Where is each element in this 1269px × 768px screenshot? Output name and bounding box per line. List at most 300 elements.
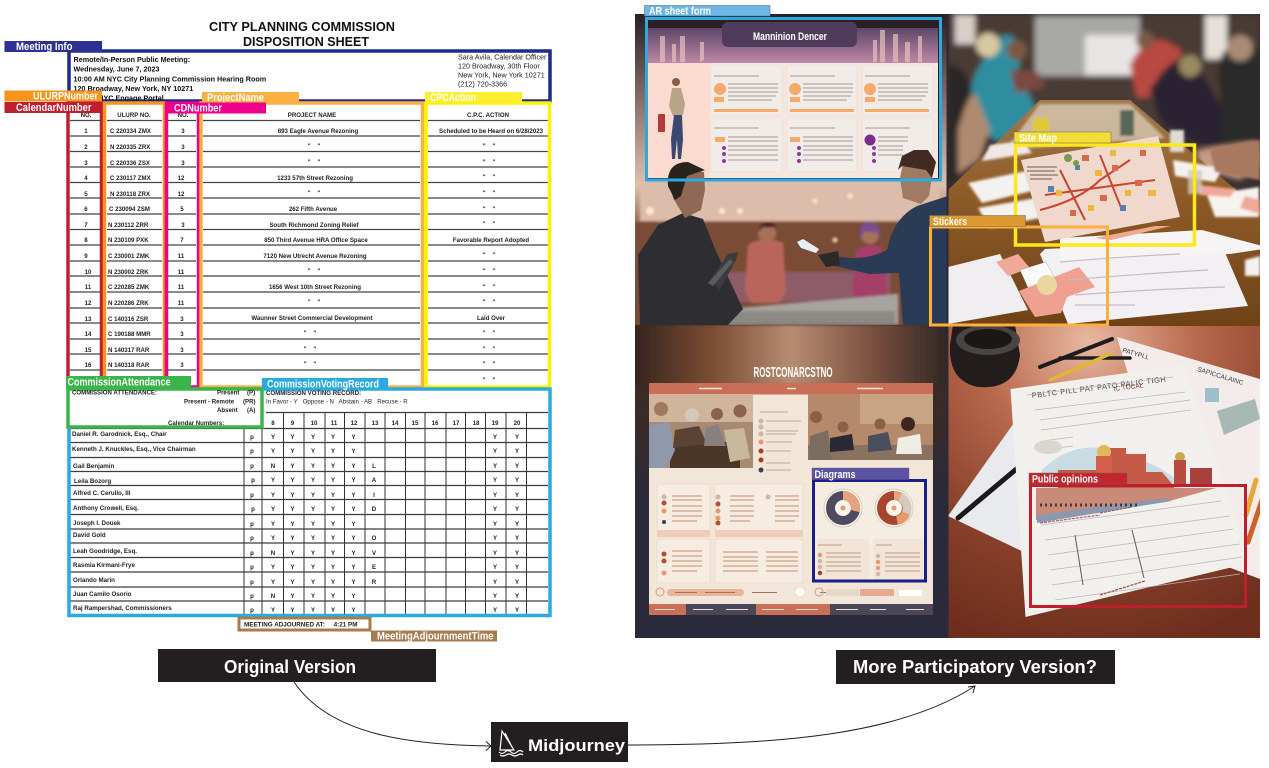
frame: stickers	[930, 227, 1108, 325]
votes: Y	[351, 579, 356, 586]
frame: AR sheet form	[646, 18, 940, 180]
votes: Y	[290, 434, 295, 441]
attendance legend	[72, 390, 256, 427]
table text: 13	[85, 316, 92, 323]
label: ULURPNumber: ULURPNumber	[33, 90, 99, 102]
main survey sheet: IC TOCAL	[1113, 382, 1144, 393]
votes: Y	[290, 521, 295, 528]
commissioner names: Juan Camilo Osorio	[73, 591, 132, 598]
votes: Y	[515, 506, 519, 513]
calendar officer address: 120 Broadway, 30th Floor	[458, 62, 540, 70]
votes	[250, 434, 519, 614]
votes: Y	[271, 564, 275, 571]
wooden table	[948, 100, 1260, 326]
table text: 5	[180, 206, 184, 213]
form cards	[711, 65, 933, 172]
table text: 7	[84, 222, 88, 229]
votes: Y	[331, 521, 335, 528]
votes: Y	[515, 579, 519, 586]
label: ProjectName	[202, 92, 299, 104]
table text: N 230109 PXK	[108, 237, 149, 244]
arrow: Midjourney to More Participatory Version	[628, 686, 975, 745]
votes: Y	[290, 477, 295, 484]
table text: Waunner Street Commercial Development	[251, 315, 373, 322]
votes: Y	[331, 434, 335, 441]
meeting adjourned box	[239, 618, 370, 630]
table text: " "	[483, 221, 495, 228]
votes: Y	[290, 564, 295, 571]
votes: p	[250, 550, 254, 557]
meeting details text: 120 Broadway, New York, NY 10271	[74, 84, 193, 93]
table text: 11	[178, 269, 185, 276]
votes: Y	[515, 448, 519, 455]
votes: Y	[493, 521, 497, 528]
votes: p	[250, 579, 254, 586]
votes: O	[372, 535, 377, 542]
table text: NO.	[81, 112, 92, 119]
votes: p	[251, 506, 255, 513]
votes: Y	[311, 535, 315, 542]
box: Midjourney: Midjourney	[528, 736, 626, 755]
row rules	[70, 120, 548, 370]
woman figure	[658, 78, 685, 159]
votes: Y	[493, 579, 497, 586]
votes: Y	[311, 564, 315, 571]
votes: Y	[515, 550, 519, 557]
voting legend: In Favor - Y Oppose - N Abstain - AB Recuse - R	[266, 398, 408, 406]
table text: " "	[308, 299, 320, 306]
votes: Y	[493, 434, 497, 441]
votes: Y	[515, 463, 519, 470]
votes: Y	[493, 607, 497, 614]
box: Midjourney	[491, 722, 628, 762]
calendar numbers header: 9	[291, 420, 295, 427]
votes: Y	[271, 579, 275, 586]
voting legend	[266, 390, 408, 406]
table text: " "	[304, 346, 316, 353]
table text: 7120 New Utrecht Avenue Rezoning	[263, 253, 367, 260]
label: CommissionAttendance: CommissionAttendance	[68, 376, 170, 388]
votes: Y	[290, 535, 295, 542]
table text: C.P.C. ACTION	[467, 112, 509, 119]
attendance legend: Present - Remote	[184, 398, 235, 406]
table text: 11	[85, 284, 92, 291]
table text: 16	[85, 362, 92, 369]
label: AR sheet form	[644, 6, 770, 18]
votes: Y	[515, 477, 519, 484]
donut 1	[824, 489, 862, 527]
label: Site Map: Site Map	[1019, 132, 1057, 144]
votes: Y	[311, 579, 315, 586]
votes: Y	[351, 463, 356, 470]
table text: " "	[483, 159, 495, 166]
label: ProjectName: ProjectName	[207, 92, 264, 104]
table text: N 230002 ZRK	[108, 269, 149, 276]
illustrated site map	[1021, 136, 1180, 242]
commissioner names: Alfred C. Cerullo, III	[73, 490, 131, 497]
label: Meeting Info: Meeting Info	[16, 41, 73, 53]
votes: Y	[311, 593, 315, 600]
table text: " "	[483, 252, 495, 259]
table text: " "	[483, 299, 495, 306]
poster header bar	[649, 383, 933, 394]
votes: Y	[493, 564, 497, 571]
votes: Y	[515, 564, 519, 571]
pens	[958, 339, 1262, 542]
attendance legend: COMMISSION ATTENDANCE:	[72, 390, 157, 396]
table text: C 140316 ZSR	[108, 316, 149, 323]
man right	[835, 196, 948, 325]
left stacked sheet	[948, 420, 1030, 555]
title	[209, 20, 395, 49]
survey title text: PBLTC PILL PAT PATO PALIC TIGH	[1031, 375, 1166, 400]
table text: 15	[85, 347, 92, 354]
votes: I	[373, 492, 375, 499]
form text lines	[714, 76, 928, 160]
caption: More Participatory Version?	[836, 650, 1115, 684]
table text: 893 Eagle Avenue Rezoning	[278, 128, 359, 135]
table text: C 220336 ZSX	[110, 160, 151, 167]
poster photo: group	[808, 394, 933, 460]
table text: PROJECT NAME	[288, 112, 336, 119]
votes: Y	[493, 535, 497, 542]
caption: Original Version	[158, 649, 436, 682]
photo: workshop table with site map	[948, 14, 1269, 326]
votes: Y	[331, 492, 335, 499]
panel: commission attendance	[68, 389, 262, 427]
attendance legend: (PR)	[243, 398, 256, 406]
votes: Y	[515, 434, 519, 441]
votes: Y	[311, 448, 315, 455]
votes: Y	[290, 607, 295, 614]
table text: 11	[178, 300, 185, 307]
table text: " "	[483, 143, 495, 150]
label: AR sheet form: AR sheet form	[649, 6, 711, 18]
commissioner names: Leah Goodridge, Esq.	[73, 548, 137, 555]
table text: 3	[181, 160, 185, 167]
votes: Y	[311, 492, 315, 499]
meeting adjourned box: MEETING ADJOURNED AT: 4:21 PM	[244, 622, 357, 628]
votes: Y	[493, 463, 497, 470]
back sheet labels: PATYPLL	[1121, 347, 1150, 362]
table text: 11	[178, 253, 185, 260]
meeting details text: Remote/In-Person Public Meeting:	[74, 55, 190, 64]
calendar numbers header	[271, 420, 521, 427]
votes: Y	[351, 477, 356, 484]
table text: 3	[180, 316, 184, 323]
table text: ULURP NO.	[117, 112, 151, 119]
votes: Y	[331, 579, 335, 586]
man left	[638, 213, 743, 325]
table text: 5	[84, 191, 88, 198]
table text: C 220334 ZMX	[110, 128, 152, 135]
votes: N	[271, 463, 275, 470]
table text: Laid Over	[477, 315, 506, 322]
meeting details text: Wednesday, June 7, 2023	[74, 64, 160, 74]
votes: Y	[311, 550, 315, 557]
votes: Y	[331, 477, 335, 484]
table text: N 230118 ZRX	[110, 191, 151, 198]
calendar numbers header: 11	[331, 420, 338, 427]
poster cards	[657, 484, 803, 583]
calendar numbers header: 10	[311, 420, 318, 427]
votes: Y	[331, 550, 335, 557]
votes: Y	[271, 477, 275, 484]
table text: " "	[308, 143, 320, 150]
meeting details text	[74, 55, 266, 102]
votes: Y	[351, 550, 356, 557]
votes: Y	[351, 448, 356, 455]
frame: calendar number column	[68, 103, 102, 387]
table text: N 220286 ZRK	[108, 300, 149, 307]
calendar numbers header: 12	[351, 420, 358, 427]
label: Stickers	[930, 216, 1026, 228]
AR sheet form content	[647, 19, 940, 180]
calendar officer address: New York, New York 10271	[458, 70, 545, 80]
table papers and objects	[968, 104, 1260, 276]
table text: " "	[483, 330, 495, 337]
sheet text lines	[1060, 254, 1225, 305]
table text: C 230001 ZMK	[108, 253, 150, 260]
table text: 1	[84, 128, 88, 135]
votes: p	[250, 593, 254, 600]
table text: 8	[84, 237, 88, 244]
commissioner names: Raj Rampershad, Commissioners	[73, 605, 172, 612]
table text: 12	[178, 175, 185, 182]
dark strip between photos	[946, 14, 948, 638]
table text: 11	[178, 284, 185, 291]
votes: Y	[290, 448, 295, 455]
panel: commission voting record	[69, 389, 550, 616]
votes: Y	[351, 434, 356, 441]
label: ULURPNumber	[4, 90, 102, 102]
table text: C 230094 ZSM	[109, 206, 150, 213]
votes: Y	[331, 506, 335, 513]
table text: 3	[181, 128, 185, 135]
calendar numbers header: 8	[271, 420, 275, 427]
table text: " "	[483, 377, 495, 384]
table text: 3	[181, 144, 185, 151]
commissioner names: David Gold	[73, 532, 106, 539]
votes: Y	[290, 593, 295, 600]
table text: " "	[304, 361, 316, 368]
meeting details text: via the NYC Engage Portal	[74, 94, 164, 102]
votes: L	[372, 463, 376, 470]
calendar officer address: (212) 720-3366	[458, 80, 507, 88]
votes: Y	[311, 463, 315, 470]
votes: Y	[290, 492, 295, 499]
table text: 850 Third Avenue HRA Office Space	[264, 237, 368, 244]
votes: Y	[515, 521, 519, 528]
votes: p	[250, 434, 254, 441]
table text: C 230117 ZMX	[110, 175, 152, 182]
commissioner names: Leila Bozorg	[74, 478, 111, 485]
votes: N	[271, 593, 275, 600]
form title pill	[722, 22, 857, 47]
table text: 2	[84, 144, 88, 151]
poster footer bar	[649, 604, 933, 615]
votes: Y	[331, 607, 335, 614]
votes: Y	[351, 593, 356, 600]
votes: Y	[290, 506, 295, 513]
attendance legend: (A)	[247, 407, 255, 414]
table text: 7	[180, 237, 184, 244]
votes: p	[250, 521, 254, 528]
label: MeetingAdjournmentTime: MeetingAdjournmentTime	[377, 630, 494, 642]
calendar numbers header: 13	[372, 420, 379, 427]
photo: library scene with infographic	[635, 325, 948, 638]
votes: N	[271, 550, 275, 557]
label: CPCAction	[425, 92, 522, 104]
label: CDNumber	[165, 102, 266, 114]
votes: p	[251, 477, 255, 484]
photo: AR meeting scene	[635, 14, 948, 325]
table text: 1233 57th Street Rezoning	[277, 175, 353, 182]
main survey sheet: SAPICCALAINC	[1196, 366, 1244, 387]
votes: Y	[311, 521, 315, 528]
votes: p	[250, 564, 254, 571]
photo: desk with paper survey forms	[948, 325, 1262, 638]
form title pill: Manninion Dencer	[753, 31, 828, 43]
frame: CPC action column	[426, 103, 550, 387]
table text: 3	[181, 222, 185, 229]
poster photo: elders	[649, 394, 753, 468]
calendar officer address	[458, 52, 547, 88]
caption: More Participatory Version?: More Participatory Version?	[853, 657, 1097, 677]
icon: Midjourney sailboat	[499, 731, 523, 756]
votes: Y	[271, 448, 275, 455]
attendance legend: Present	[217, 390, 239, 396]
commissioner names: Kenneth J. Knuckles, Esq., Vice Chairman	[72, 446, 196, 453]
commissioner names: Daniel R. Garodnick, Esq., Chair	[72, 431, 167, 438]
calendar officer address: Sara Avila, Calendar Officer	[458, 52, 547, 62]
frame: CD number column	[166, 103, 198, 387]
label: CPCAction: CPCAction	[430, 92, 476, 104]
watercolor town	[1036, 445, 1216, 523]
votes: Y	[331, 463, 335, 470]
workshop sheets on table	[948, 230, 1269, 324]
label: Meeting Info	[4, 41, 102, 53]
infographic poster	[649, 383, 933, 604]
votes: Y	[331, 593, 335, 600]
sticker notes	[996, 254, 1095, 317]
votes: p	[250, 535, 254, 542]
votes: Y	[351, 506, 356, 513]
title: DISPOSITION SHEET	[243, 35, 369, 49]
commissioner names	[72, 431, 196, 612]
arrow: Original Version to Midjourney	[294, 682, 491, 750]
votes: Y	[351, 492, 356, 499]
mug	[950, 325, 1020, 387]
votes: Y	[271, 607, 275, 614]
attendance legend: Calendar Numbers:	[168, 420, 224, 427]
votes: p	[250, 463, 254, 470]
table text: " "	[308, 159, 320, 166]
table text: N 140317 RAR	[108, 347, 150, 354]
table text: " "	[483, 206, 495, 213]
title: CITY PLANNING COMMISSION	[209, 20, 395, 34]
label: CommissionVotingRecord: CommissionVotingRecord	[267, 378, 379, 390]
votes: Y	[493, 477, 497, 484]
votes: Y	[515, 492, 519, 499]
votes: Y	[290, 550, 295, 557]
votes: Y	[331, 448, 335, 455]
votes: Y	[271, 506, 275, 513]
table text: 4	[84, 175, 88, 182]
votes: Y	[290, 579, 295, 586]
votes: Y	[311, 607, 315, 614]
frame: public opinions	[1030, 486, 1246, 606]
votes: Y	[311, 506, 315, 513]
votes: Y	[290, 463, 295, 470]
table text: 3	[84, 160, 88, 167]
calendar numbers header: 17	[453, 420, 460, 427]
main survey sheet	[1010, 347, 1260, 617]
votes: Y	[493, 492, 497, 499]
frame: ULURP number column	[104, 103, 164, 387]
label: Diagrams: Diagrams	[814, 469, 856, 481]
table text: 3	[180, 347, 184, 354]
table text: " "	[483, 190, 495, 197]
commissioner names: Anthony Crowell, Esq.	[73, 505, 139, 512]
votes: A	[372, 477, 377, 484]
frame: diagrams	[814, 480, 926, 581]
votes: Y	[271, 535, 275, 542]
table text: C 220285 ZMK	[108, 284, 150, 291]
table text: 9	[84, 253, 88, 260]
table text: " "	[483, 268, 495, 275]
votes: R	[372, 579, 377, 586]
table text: " "	[483, 284, 495, 291]
commissioner names: Gail Benjamin	[73, 463, 114, 470]
poster card text lines	[672, 496, 799, 571]
voting legend: COMMISSION VOTING RECORD:	[266, 390, 361, 397]
table text: 3	[180, 362, 184, 369]
table text: 6	[84, 206, 88, 213]
calendar numbers header: 19	[492, 420, 499, 427]
purple bullets	[722, 146, 876, 163]
donut card rows	[817, 539, 869, 579]
poster title: ROSTCONARCSTNO	[754, 364, 833, 381]
votes: p	[250, 448, 254, 455]
table text: N 140318 RAR	[108, 362, 150, 369]
table text: C 190188 MMR	[108, 331, 151, 338]
votes: p	[250, 607, 254, 614]
table text: Favorable Report Adopted	[453, 237, 529, 244]
commissioner names: Joseph I. Douek	[73, 520, 121, 527]
table text: 262 Fifth Avenue	[289, 206, 338, 213]
blurred room and participants	[948, 14, 1260, 183]
table text: 12	[178, 191, 185, 198]
form lines	[1027, 377, 1242, 600]
label: CalendarNumber: CalendarNumber	[16, 102, 92, 114]
frame: site map	[1016, 145, 1194, 245]
votes: Y	[493, 593, 497, 600]
votes: D	[372, 506, 377, 513]
poster donut charts	[815, 482, 924, 579]
calendar numbers header: 16	[432, 420, 439, 427]
votes: Y	[331, 564, 335, 571]
label: CDNumber: CDNumber	[174, 102, 223, 114]
votes: Y	[493, 448, 497, 455]
label: Diagrams	[812, 468, 909, 481]
votes: Y	[311, 434, 315, 441]
poster bottom pills	[656, 588, 922, 596]
orange card accents	[714, 83, 929, 146]
calendar numbers header: 14	[392, 420, 399, 427]
table text: NO.	[178, 112, 189, 119]
label: Stickers: Stickers	[933, 216, 967, 228]
